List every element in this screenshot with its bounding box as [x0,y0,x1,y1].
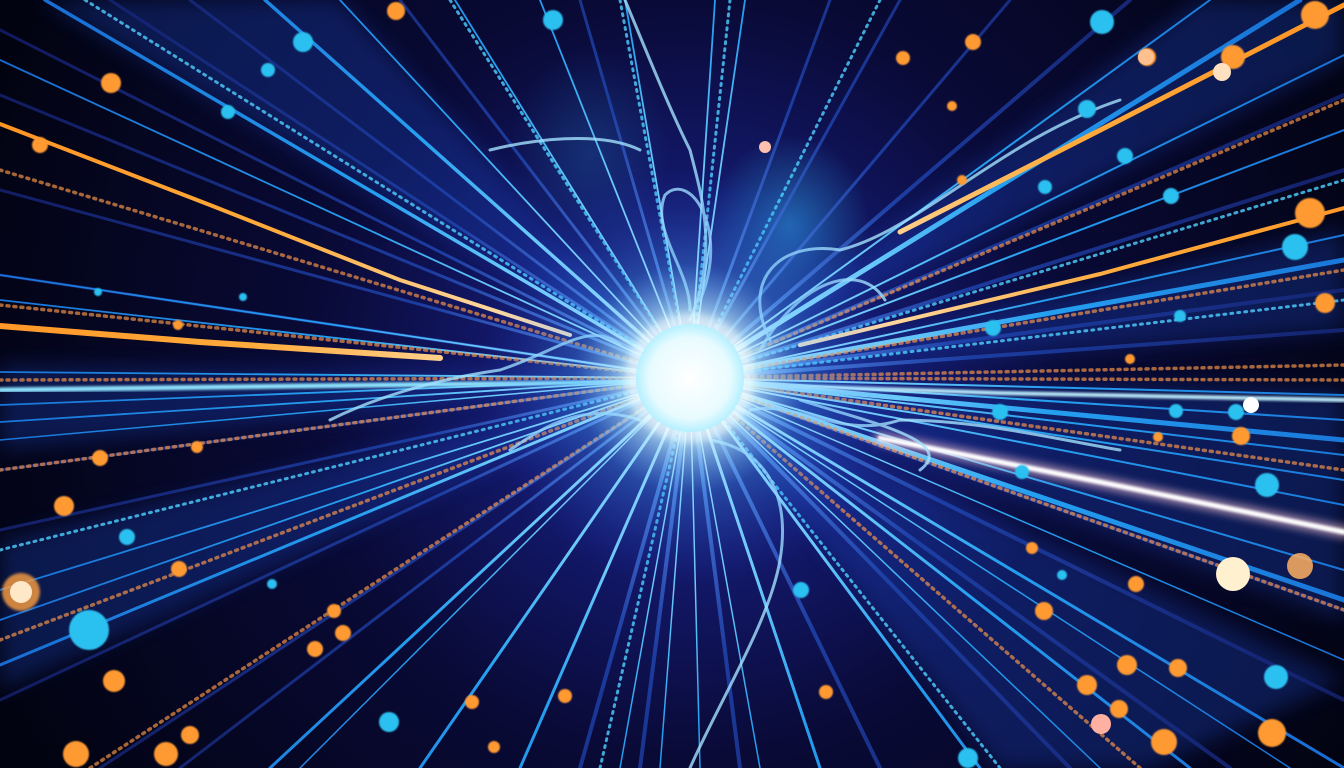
orange light streaks [0,5,1344,358]
central glow [480,168,900,588]
bright blue rays right and bottom [690,0,1344,768]
hazy cyan dust clouds [510,50,870,315]
bright blue rays left and top [0,0,745,768]
glowing white core orb [626,314,754,442]
energy wisps around core [330,0,1120,768]
white hot streak right [0,382,1344,532]
